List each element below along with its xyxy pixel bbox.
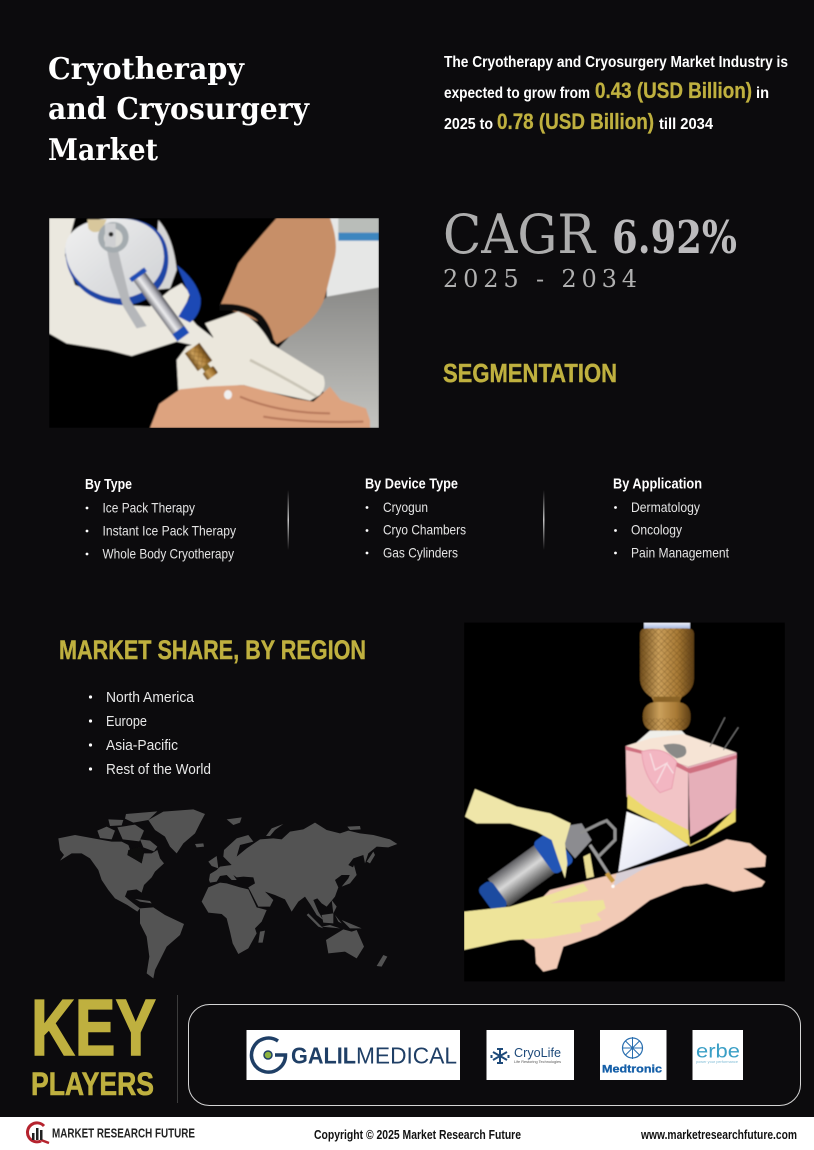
region list: North America	[106, 689, 195, 706]
segment column: by device type	[365, 476, 466, 560]
world map	[58, 809, 397, 978]
segment column: by application: By Application	[613, 476, 702, 492]
title: Cryotherapy	[48, 52, 245, 87]
region list: Europe	[106, 713, 147, 730]
region list: Asia-Pacific	[106, 737, 178, 754]
segment column: by application: Pain Management	[631, 544, 729, 560]
market growth summary text: expected to grow from	[444, 85, 590, 102]
market growth summary text: 0.43 (USD Billion)	[595, 78, 752, 103]
heading: key players	[31, 983, 156, 1102]
segment column: by application: Oncology	[631, 522, 682, 538]
segment column: by type: By Type	[85, 476, 132, 493]
segment column: by device type: Gas Cylinders	[383, 544, 458, 560]
footer logo: MARKET RESEARCH FUTURE	[52, 1126, 195, 1140]
segment column: by application: Dermatology	[631, 499, 700, 515]
title	[48, 52, 310, 168]
photo: cryo spray on hand	[49, 218, 379, 428]
logo: erbe	[692, 1030, 743, 1080]
logo: Medtronic: Medtronic	[602, 1064, 662, 1076]
footer bar	[0, 1117, 814, 1150]
illustration: cryosurgery on forearm	[464, 622, 785, 982]
heading: market share by region: MARKET SHARE, BY REGION	[59, 635, 366, 665]
logo: CryoLife: Life Restoring Technologies	[514, 1060, 561, 1064]
copyright: Copyright © 2025 Market Research Future	[314, 1128, 521, 1142]
region list	[89, 689, 211, 778]
segment column: by type: Instant Ice Pack Therapy	[102, 522, 236, 538]
logo: CryoLife	[486, 1030, 574, 1080]
title: and Cryosurgery	[48, 92, 310, 127]
CAGR figure: CAGR	[443, 203, 596, 266]
market growth summary text: till 2034	[659, 116, 713, 133]
segment column: by device type: Cryo Chambers	[383, 522, 466, 538]
heading: segmentation: SEGMENTATION	[443, 358, 617, 388]
logo: erbe: erbe	[696, 1042, 740, 1062]
segment column: by type: Whole Body Cryotherapy	[102, 546, 234, 562]
title: Market	[48, 133, 158, 168]
logo: Galil Medical: GALIL	[291, 1042, 356, 1068]
segment column: by application	[613, 476, 729, 560]
region list: Rest of the World	[106, 761, 211, 778]
CAGR figure: 2025 - 2034	[443, 265, 637, 293]
logo: Galil Medical: MEDICAL	[356, 1042, 457, 1068]
market growth summary text	[444, 54, 788, 134]
logo: CryoLife: CryoLife	[514, 1045, 561, 1060]
footer logo	[27, 1123, 195, 1143]
logo: erbe: power your performance	[696, 1059, 739, 1064]
segment column: by device type: Cryogun	[383, 499, 428, 515]
segment column: by type: Ice Pack Therapy	[102, 500, 195, 516]
segment column: by type	[85, 476, 236, 562]
logo: Galil Medical	[246, 1030, 460, 1080]
market growth summary text: 0.78 (USD Billion)	[497, 109, 654, 134]
market growth summary text: 2025 to	[444, 116, 493, 133]
logo: Medtronic	[600, 1030, 666, 1080]
heading: key players: KEY	[31, 983, 156, 1072]
segment column: by device type: By Device Type	[365, 476, 458, 492]
heading: key players: PLAYERS	[31, 1066, 154, 1102]
CAGR figure	[443, 203, 737, 293]
CAGR figure: 6.92%	[612, 211, 737, 264]
market growth summary text: in	[756, 85, 769, 102]
key players panel	[188, 1004, 800, 1106]
